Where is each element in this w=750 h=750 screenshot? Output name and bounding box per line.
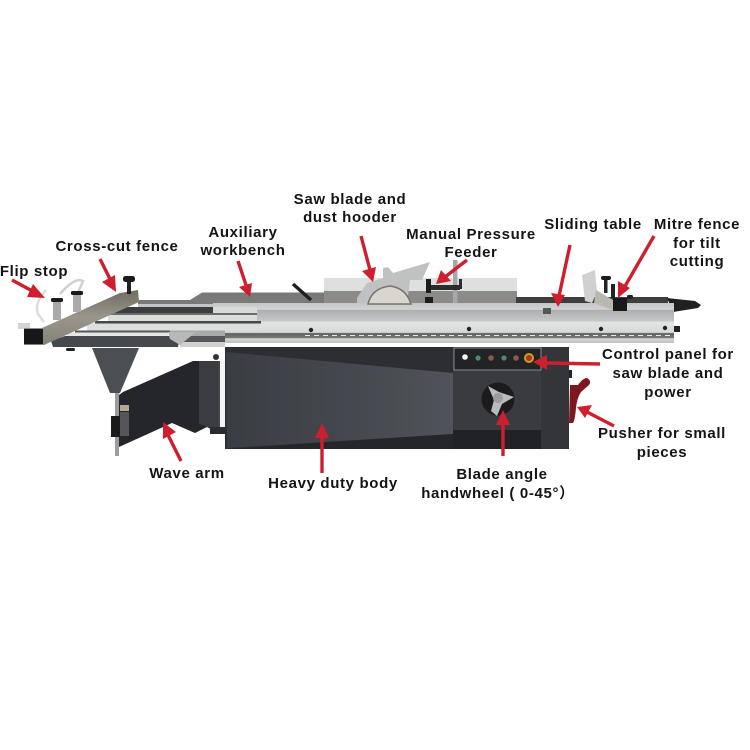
arrow: pusher	[577, 405, 614, 426]
label: manual pressure feeder: Feeder	[444, 244, 498, 261]
flip stop	[37, 280, 83, 322]
right table extension	[516, 297, 701, 312]
saw machine	[18, 260, 701, 456]
arrow: mitre fence	[618, 236, 654, 298]
arrow: blade angle handwheel	[496, 410, 510, 456]
label: auxiliary workbench: workbench	[199, 242, 286, 259]
arrow: saw blade and dust hooder	[361, 236, 376, 282]
table lock lever	[293, 284, 311, 300]
label: mitre fence for tilt cutting: Mitre fence	[654, 216, 740, 233]
wave arm	[111, 354, 226, 456]
label: blade angle handwheel: handwheel ( 0-45°）	[421, 485, 575, 502]
arrow: sliding table	[551, 245, 570, 307]
arrow: manual pressure feeder	[436, 260, 467, 284]
label: pusher for small pieces: Pusher for small	[598, 425, 726, 442]
support leg	[92, 348, 139, 393]
auxiliary workbench	[138, 292, 327, 304]
label: wave arm: Wave arm	[149, 465, 225, 482]
label: blade angle handwheel: Blade angle	[456, 466, 548, 483]
arrow: wave arm	[163, 422, 181, 461]
arrow: control panel	[533, 355, 600, 370]
label: saw blade and dust hooder	[294, 191, 406, 226]
arrow: flip stop	[12, 280, 45, 298]
label: saw blade and dust hooder: Saw blade and	[294, 191, 406, 208]
manual pressure feeder	[425, 260, 462, 303]
label: mitre fence for tilt cutting	[654, 216, 740, 270]
label: saw blade and dust hooder: dust hooder	[303, 209, 397, 226]
label: pusher for small pieces	[598, 425, 726, 461]
saw blade and dust hood	[357, 262, 430, 304]
label: mitre fence for tilt cutting: for tilt	[673, 235, 721, 252]
extension rails	[67, 304, 261, 347]
label: auxiliary workbench	[199, 224, 286, 259]
blade angle handwheel	[482, 382, 514, 416]
label: manual pressure feeder	[406, 226, 536, 261]
mitre fence	[582, 270, 633, 311]
label: flip stop: Flip stop	[0, 263, 68, 280]
label: blade angle handwheel	[421, 466, 575, 502]
label: control panel	[602, 346, 734, 401]
arrow: cross-cut fence	[100, 259, 116, 292]
main cabinet body	[225, 347, 572, 449]
main sliding rail	[213, 303, 680, 343]
label: control panel: saw blade and	[613, 365, 723, 382]
control panel	[454, 348, 541, 370]
arrow: auxiliary workbench	[238, 261, 252, 297]
label: sliding table: Sliding table	[544, 216, 642, 233]
lower beam	[51, 332, 196, 351]
label: pusher for small pieces: pieces	[637, 444, 687, 461]
pusher for small pieces	[569, 378, 590, 423]
arrow: heavy duty body	[315, 423, 329, 473]
label: manual pressure feeder: Manual Pressure	[406, 226, 536, 243]
label: mitre fence for tilt cutting: cutting	[670, 253, 724, 270]
rear fence	[324, 278, 517, 304]
cross-cut fence	[18, 276, 139, 345]
label: auxiliary workbench: Auxiliary	[208, 224, 278, 241]
label: control panel: power	[644, 384, 692, 401]
label: heavy duty body: Heavy duty body	[268, 475, 398, 492]
label: cross-cut fence: Cross-cut fence	[55, 238, 179, 255]
label: control panel: Control panel for	[602, 346, 734, 363]
